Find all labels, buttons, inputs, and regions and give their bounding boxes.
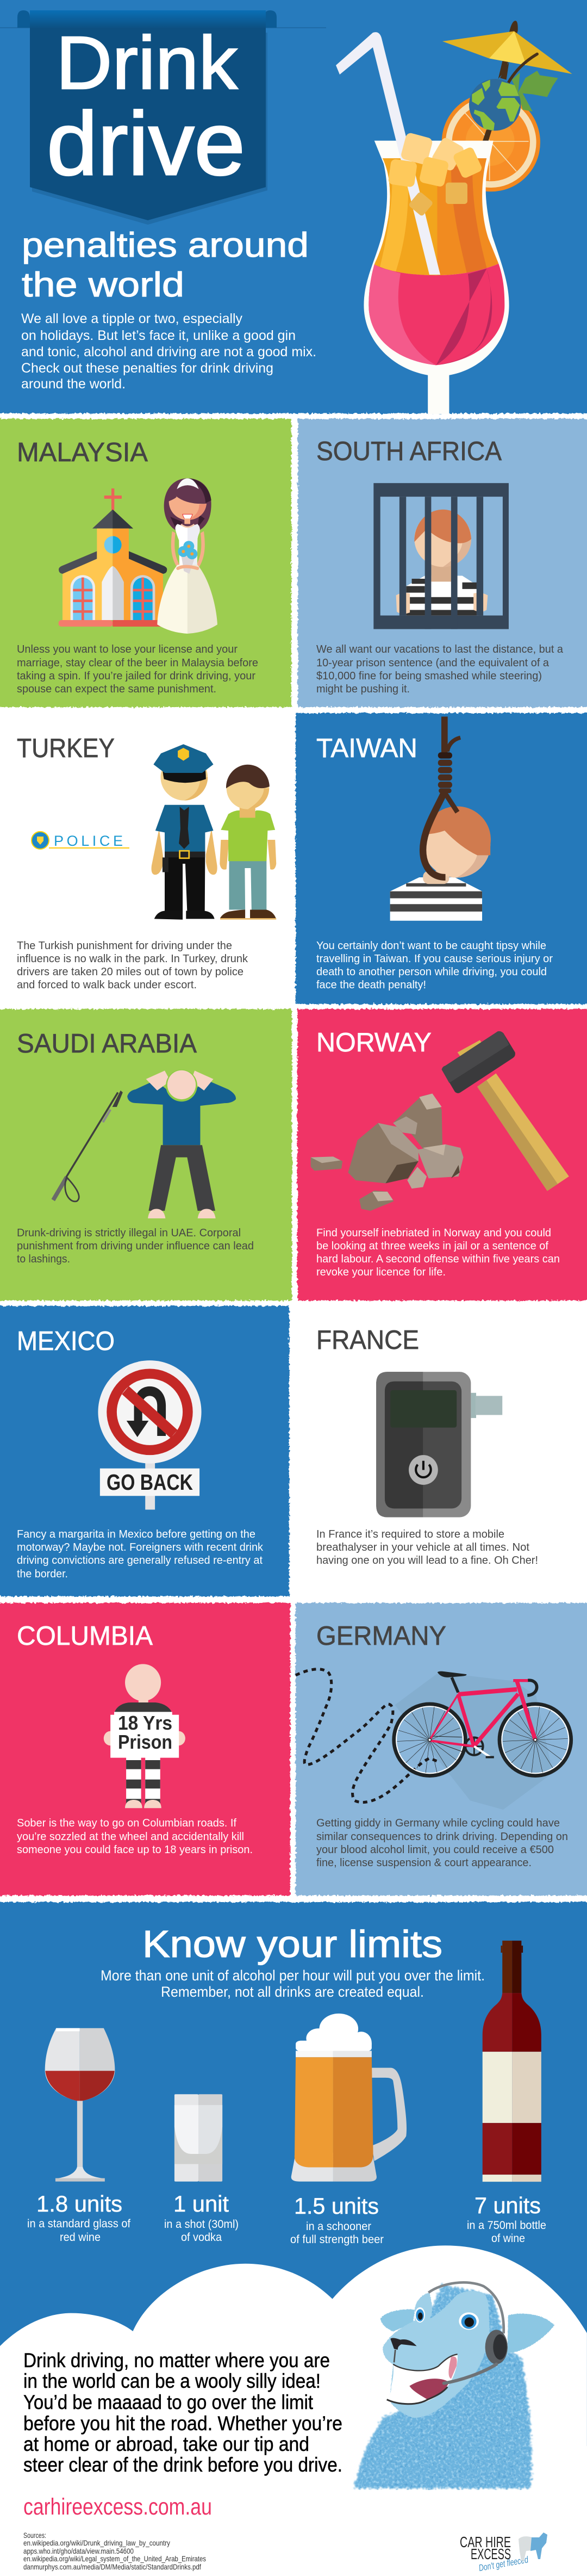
- title: Drink drive: [47, 21, 245, 194]
- title: Drink drive: Drink: [56, 21, 238, 105]
- label: 18 Yrs Prison: Prison: [118, 1731, 172, 1753]
- panel: France: [316, 1326, 538, 1566]
- text: Norway penalty: Find yourself inebriated in Norway and you could: [316, 1227, 551, 1239]
- heading: TURKEY: TURKEY: [17, 734, 115, 763]
- drink: wine bottle: [467, 1941, 546, 2245]
- drink: red wine: 1.8 units: [36, 2191, 122, 2216]
- text: Norway penalty: be looking at three weeks in jail or a sentence of: [316, 1240, 548, 1252]
- cover: trim under sheep: [337, 2490, 576, 2506]
- text: France penalty: breathalyser in your vehicle at all times. Not: [316, 1541, 529, 1553]
- text: South Africa penalty: $10,000 fine for being smashed while steering): [316, 670, 542, 682]
- text: Norway penalty: [316, 1227, 560, 1278]
- text: limits intro: More than one unit of alcohol per hour will put you over the limit.: [101, 1967, 485, 1984]
- panel: Malaysia: [0, 419, 291, 707]
- icon: policeman and man: [152, 744, 276, 920]
- panel: Norway: [297, 1009, 587, 1301]
- label: 18 Yrs Prison: [118, 1712, 172, 1753]
- label: GO BACK: GO BACK: [107, 1470, 193, 1495]
- icon: prisoner holding sign: [104, 1664, 185, 1808]
- text: Columbia penalty: Sober is the way to go on Columbian roads. If: [17, 1817, 236, 1829]
- intro paragraph: [21, 311, 316, 392]
- icon: cocktail: [336, 21, 572, 414]
- text: Mexico penalty: the border.: [17, 1568, 68, 1580]
- panel: Saudi Arabia: [0, 1009, 292, 1301]
- panel: Germany: [296, 1603, 587, 1896]
- drink: wine bottle: in a 750ml bottle: [467, 2219, 546, 2232]
- intro paragraph: We all love a tipple or two, especially: [21, 311, 242, 326]
- text: South Africa penalty: 10-year prison sentence (and the equivalent of a: [316, 657, 549, 669]
- ice cubes: [388, 132, 483, 216]
- intro paragraph: Check out these penalties for drink driving: [21, 361, 273, 376]
- heading: NORWAY: NORWAY: [316, 1028, 432, 1057]
- logo: Car Hire Excess: CAR HIRE: [460, 2534, 511, 2550]
- text: sources: en.wikipedia.org/wiki/Legal_system_of_the_United_Arab_Emirates: [23, 2554, 206, 2563]
- icon: police badge logo: POLICE: [54, 833, 123, 849]
- drink: beer: of full strength beer: [290, 2233, 384, 2246]
- heading: COLUMBIA: COLUMBIA: [17, 1621, 153, 1651]
- heading: MEXICO: MEXICO: [17, 1327, 115, 1356]
- text: Columbia penalty: someone you could face up to 18 years in prison.: [17, 1843, 253, 1856]
- panel: Taiwan: [296, 713, 587, 1004]
- heading: TAIWAN: TAIWAN: [316, 734, 417, 763]
- text: Norway penalty: revoke your licence for life.: [316, 1266, 446, 1278]
- text: Mexico penalty: [17, 1528, 264, 1580]
- panel: Know your limits background: [0, 1902, 587, 2446]
- text: Norway penalty: hard labour. A second offense within five years can: [316, 1253, 560, 1265]
- text: Mexico penalty: driving convictions are generally refused re-entry at: [17, 1554, 263, 1566]
- text: sources: danmurphys.com.au/media/DM/Media/static/StandardDrinks.pdf: [23, 2562, 201, 2571]
- text: South Africa penalty: might be pushing it.: [316, 683, 410, 695]
- drink: red wine: [27, 2028, 130, 2244]
- intro paragraph: and tonic, alcohol and driving are not a good mix.: [21, 344, 316, 360]
- text: Mexico penalty: Fancy a margarita in Mexico before getting on the: [17, 1528, 255, 1540]
- intro paragraph: around the world.: [21, 376, 126, 392]
- text: Germany penalty: similar consequences to drink driving. Depending on: [316, 1830, 568, 1843]
- hanging rule behind ribbon: [0, 27, 326, 28]
- title: Drink drive: drive: [47, 94, 245, 194]
- icon: no U-turn sign: [98, 1360, 202, 1509]
- drink: red wine: red wine: [60, 2231, 101, 2244]
- icon: man and whip: [53, 1069, 236, 1218]
- drink: vodka shot: in a shot (30ml): [164, 2218, 239, 2231]
- text: Saudi Arabia penalty: punishment from driving under influence can lead: [17, 1240, 254, 1252]
- heading: FRANCE: FRANCE: [316, 1326, 419, 1355]
- panel: header background: [0, 0, 587, 413]
- link: website: carhireexcess.com.au: [23, 2494, 212, 2520]
- text: Malaysia penalty: spouse can expect the same punishment.: [17, 683, 216, 695]
- text: Malaysia penalty: Unless you want to lose your license and your: [17, 643, 238, 655]
- text: Taiwan penalty: face the death penalty!: [316, 979, 426, 991]
- subtitle: penalties around: [22, 226, 309, 264]
- text: Taiwan penalty: You certainly don’t want to be caught tipsy while: [316, 939, 546, 952]
- text: Malaysia penalty: taking a spin. If you’re jailed for drink driving, your: [17, 670, 255, 682]
- text: South Africa penalty: [316, 643, 564, 695]
- text: sources: [23, 2531, 206, 2571]
- text: Columbia penalty: you’re sozzled at the wheel and accidentally kill: [17, 1830, 244, 1843]
- text: Germany penalty: [316, 1817, 568, 1869]
- panel: South Africa: [298, 419, 587, 707]
- panel: Mexico: [0, 1306, 289, 1596]
- intro paragraph: on holidays. But let’s face it, unlike a good gin: [21, 328, 296, 343]
- drink: red wine: in a standard glass of: [27, 2218, 130, 2230]
- text: Germany penalty: fine, license suspension & court appearance.: [316, 1856, 532, 1869]
- logo: Car Hire Excess: EXCESS: [471, 2546, 511, 2562]
- white cloud footer: [0, 2245, 587, 2576]
- banner ribbon: [17, 10, 277, 225]
- text: Mexico penalty: motorway? Maybe not. Foreigners with recent drink: [17, 1541, 264, 1553]
- icon: breathalyser: [376, 1372, 502, 1518]
- icon: hangman noose: [390, 716, 491, 921]
- orange slice, umbrella, globe: [442, 21, 572, 191]
- straw: [336, 32, 440, 275]
- text: Turkey penalty: and forced to walk back under escort.: [17, 979, 197, 991]
- logo: Car Hire Excess: Don't get fleeced: [478, 2554, 529, 2573]
- text: France penalty: having one on you will lead to a fine. Oh Cher!: [316, 1554, 538, 1566]
- heading: GERMANY: GERMANY: [316, 1621, 446, 1651]
- text: closing message: before you hit the road. Whether you’re: [23, 2412, 342, 2435]
- text: Turkey penalty: influence is no walk in the park. In Turkey, drunk: [17, 952, 248, 965]
- drink: wine bottle: of wine: [491, 2232, 525, 2245]
- heading: MALAYSIA: MALAYSIA: [17, 438, 148, 467]
- heading: Know your limits: Know your limits: [142, 1923, 442, 1965]
- text: limits intro: [101, 1967, 485, 2000]
- text: closing message: [23, 2349, 342, 2476]
- drink: wine bottle: 7 units: [474, 2193, 541, 2218]
- text: Saudi Arabia penalty: Drunk-driving is strictly illegal in UAE. Corporal: [17, 1227, 241, 1239]
- panel: Turkey: [17, 734, 276, 991]
- text: closing message: steer clear of the drink before you drive.: [23, 2454, 342, 2476]
- text: Turkey penalty: The Turkish punishment for driving under the: [17, 939, 232, 952]
- heading: SOUTH AFRICA: SOUTH AFRICA: [316, 437, 502, 466]
- text: Saudi Arabia penalty: [17, 1227, 254, 1265]
- text: Taiwan penalty: [316, 939, 553, 991]
- icon: blue sheep with headset: [354, 2282, 554, 2488]
- text: Columbia penalty: [17, 1817, 253, 1856]
- icon: hammer and rocks: [311, 1031, 569, 1211]
- glass and liquid: [364, 141, 509, 414]
- drink: beer: 1.5 units: [294, 2193, 379, 2219]
- drink: vodka shot: [164, 2094, 239, 2244]
- text: closing message: in the world can be a wooly silly idea!: [23, 2370, 321, 2392]
- label: 18 Yrs Prison: 18 Yrs: [118, 1712, 172, 1734]
- panel: Columbia: [0, 1603, 290, 1896]
- text: sources: apps.who.int/gho/data/view.main.54600: [23, 2547, 134, 2555]
- text: Germany penalty: Getting giddy in Germany while cycling could have: [316, 1817, 560, 1829]
- text: Malaysia penalty: marriage, stay clear of the beer in Malaysia before: [17, 657, 258, 669]
- text: France penalty: [316, 1528, 538, 1566]
- text: Taiwan penalty: travelling in Taiwan. If you cause serious injury or: [316, 952, 553, 965]
- text: South Africa penalty: We all want our vacations to last the distance, but a: [316, 643, 564, 655]
- text: sources: en.wikipedia.org/wiki/Drunk_driving_law_by_country: [23, 2538, 170, 2547]
- drink: beer: [290, 2014, 407, 2246]
- text: closing message: Drink driving, no matter where you are: [23, 2349, 330, 2371]
- text: closing message: at home or abroad, take our tip and: [23, 2433, 309, 2455]
- drink: vodka shot: 1 unit: [173, 2191, 229, 2216]
- drink: beer: in a schooner: [306, 2220, 371, 2233]
- text: Taiwan penalty: death to another person while driving, you could: [316, 965, 547, 978]
- drink: vodka shot: of vodka: [181, 2231, 222, 2244]
- icon: church and bride: [59, 478, 217, 634]
- text: Turkey penalty: [17, 939, 248, 991]
- icon: prisoner behind bars: [373, 483, 509, 629]
- subtitle: [22, 226, 309, 304]
- text: sources: Sources:: [23, 2531, 46, 2540]
- text: France penalty: In France it’s required to store a mobile: [316, 1528, 504, 1540]
- text: Germany penalty: your blood alcohol limit, you could receive a €500: [316, 1843, 554, 1856]
- text: Turkey penalty: drivers are taken 20 miles out of town by police: [17, 965, 243, 978]
- mint leaf: [512, 71, 558, 112]
- text: limits intro: Remember, not all drinks are created equal.: [161, 1984, 424, 2000]
- subtitle: the world: [22, 266, 184, 304]
- icon: police badge logo: [32, 832, 129, 849]
- text: Saudi Arabia penalty: to lashings.: [17, 1253, 70, 1265]
- text: Malaysia penalty: [17, 643, 258, 695]
- heading: SAUDI ARABIA: SAUDI ARABIA: [17, 1029, 197, 1058]
- icon: bicycle with dashed path: [296, 1669, 571, 1810]
- icon: small sheep: [519, 2532, 547, 2561]
- text: closing message: You’d be maaaad to go over the limit: [23, 2391, 314, 2413]
- logo: Car Hire Excess: [460, 2532, 547, 2573]
